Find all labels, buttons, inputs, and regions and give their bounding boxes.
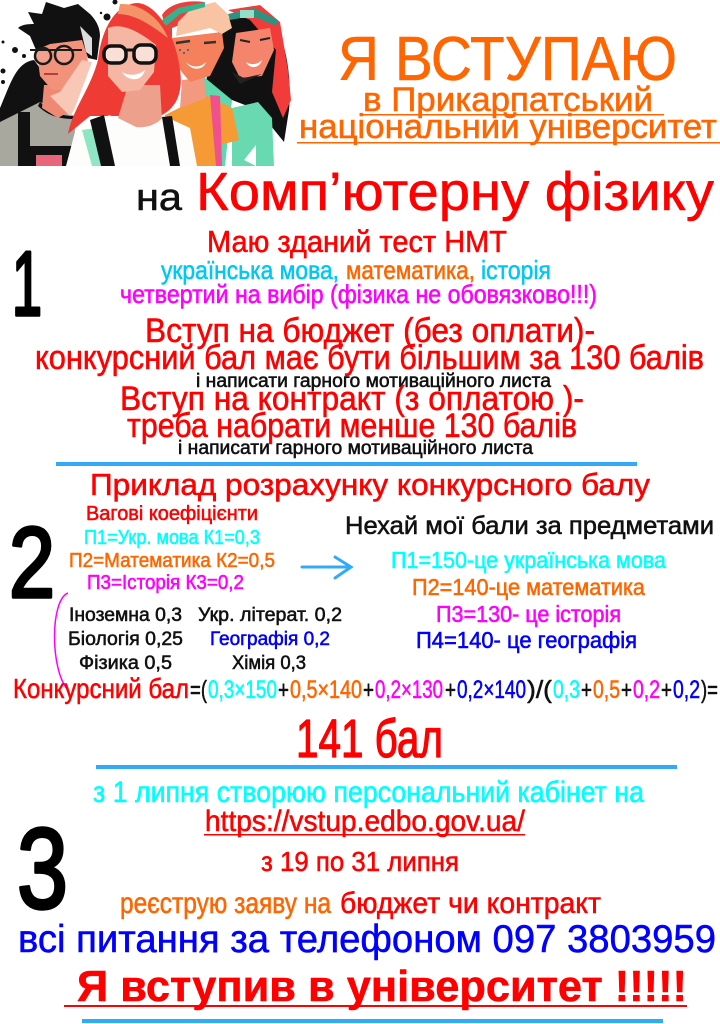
text: coefficient 1: П1=Укр. мова К1=0,3 <box>84 527 260 549</box>
text: score 4: П4=140- це географія <box>416 627 637 653</box>
text: score 2: П2=140-це математика <box>412 574 645 600</box>
subtitle: Prykarpattia: в Прикарпатський <box>363 81 653 119</box>
text: fourth subject: четвертий на вибір (фізика не обовязково!!!) <box>120 279 597 309</box>
formula: 0,2 <box>633 676 660 704</box>
formula: + <box>661 676 672 704</box>
formula: =( <box>190 676 207 704</box>
panel: other subject coefficients: Хімія 0,3 <box>232 653 306 674</box>
formula: + <box>621 676 632 704</box>
panel: other subject coefficients: Іноземна 0,3 <box>69 605 182 626</box>
illustration: four students <box>0 0 291 166</box>
text: phone: всі питання за телефоном 097 3803959 <box>18 918 716 961</box>
text: application <box>120 887 601 920</box>
text: exam passed: Маю зданий тест НМТ <box>207 224 507 259</box>
text: score 3: П3=130- це історія <box>436 601 621 627</box>
title: Я ВСТУПАЮ <box>338 25 677 94</box>
formula: 0,5×140 <box>290 676 362 704</box>
text: dates: з 19 по 31 липня <box>261 846 459 877</box>
text: motivation letter: і написати гарного мотиваційного листа <box>196 371 551 392</box>
formula: + <box>363 676 374 704</box>
subtitle: national university: національний університет <box>299 108 717 146</box>
text: application: бюджет чи контракт <box>340 887 601 920</box>
figure: girl with red hair and glasses <box>66 3 197 166</box>
text: budget admission: Вступ на бюджет (без оплати)- <box>145 312 595 350</box>
panel: other subject coefficients: Фізика 0,5 <box>79 653 172 674</box>
formula: + <box>278 676 289 704</box>
text: coefficients heading: Вагові коефіцієнти <box>86 503 258 525</box>
figure: boy with blond hair <box>162 1 239 166</box>
step number 3: 3 <box>17 806 68 933</box>
panel: other subject coefficients: Біологія 0,25 <box>68 629 183 650</box>
text: coefficient 2: П2=Математика К2=0,5 <box>69 550 275 572</box>
text: coefficient 3: П3=Історія К3=0,2 <box>87 572 244 594</box>
figure: boy with glasses <box>0 2 100 166</box>
step number 1: 1 <box>12 234 42 335</box>
formula: 0,2×130 <box>375 676 443 704</box>
text: required subjects: українська мова, <box>161 255 339 285</box>
panel: my scores <box>345 512 714 653</box>
formula: 0,2 <box>673 676 700 704</box>
closing slogan: Я вступив в університет !!!!! <box>77 962 687 1011</box>
formula: Конкурсний бал <box>13 673 189 704</box>
text: motivation letter: і написати гарного мотиваційного листа <box>178 438 533 459</box>
text: required subjects: математика, <box>346 255 475 285</box>
formula: 0,3 <box>553 676 580 704</box>
formula: 0,5 <box>593 676 620 704</box>
panel: other subject coefficients: Географія 0,2 <box>210 629 330 650</box>
result: score: 141 бал <box>296 709 443 769</box>
text: contract score: треба набрати менше 130 балів <box>127 407 577 445</box>
arrow <box>302 557 351 578</box>
text: required subjects: історія <box>481 255 551 285</box>
formula: 0,2×140 <box>457 676 526 704</box>
step number 2: 2 <box>9 507 55 619</box>
text: website link: https://vstup.edbo.gov.ua/ <box>205 805 526 838</box>
text: personal account: з 1 липня створюю персональний кабінет на <box>93 776 644 809</box>
text: application: реєструю заяву на <box>120 887 331 920</box>
panel: weight coefficients <box>69 503 275 594</box>
heading: computer physics: на <box>136 177 183 219</box>
formula: + <box>445 676 456 704</box>
heading: calculation example: Приклад розрахунку конкурсного балу <box>90 467 650 502</box>
formula: 0,3×150 <box>208 676 277 704</box>
formula: )/( <box>527 676 553 704</box>
heading: computer physics: Комп’ютерну фізику <box>196 162 714 222</box>
formula <box>13 673 718 704</box>
panel: other subject coefficients: Укр. літерат. 0,2 <box>198 605 342 626</box>
bracket <box>54 593 68 690</box>
text: score 1: П1=150-це українська мова <box>391 547 666 573</box>
text: required subjects <box>161 255 551 285</box>
formula: + <box>581 676 592 704</box>
figure: girl with long red and dark hair <box>198 5 291 166</box>
icon: ink splatter <box>0 0 118 166</box>
text: contract admission: Вступ на контракт (з оплатою )- <box>120 380 584 418</box>
panel: other subject coefficients <box>68 605 342 674</box>
text: scores heading: Нехай мої бали за предметами <box>345 512 714 540</box>
